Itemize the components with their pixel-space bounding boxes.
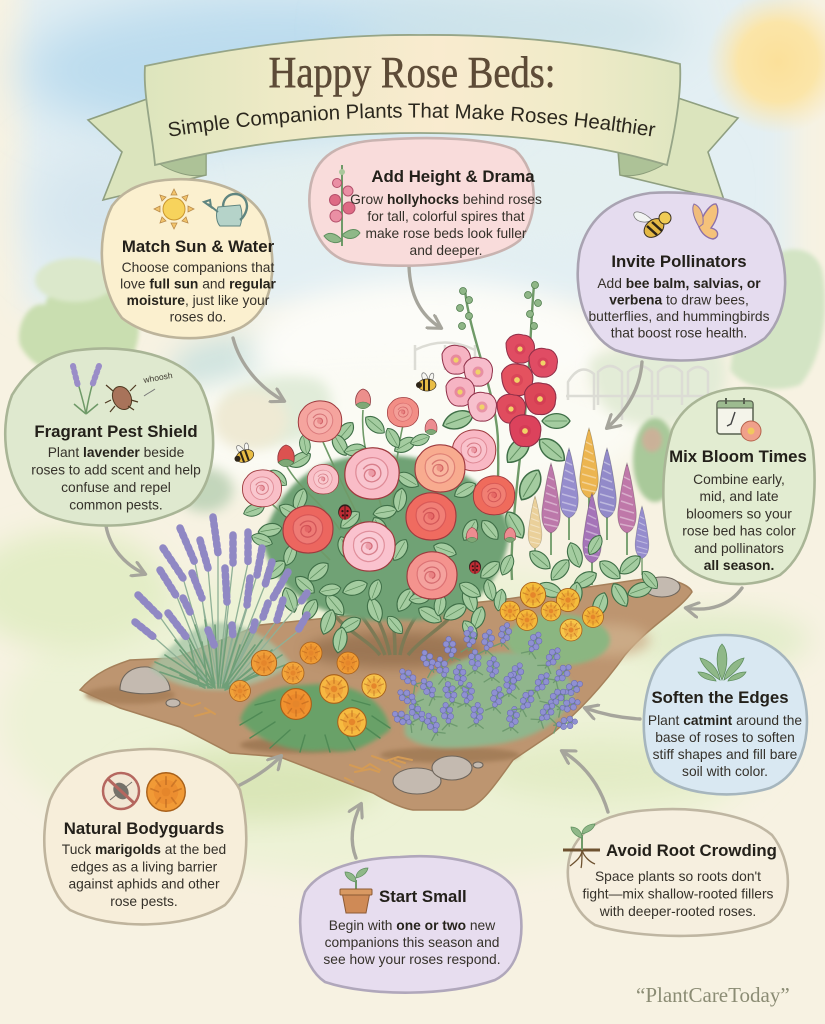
body text: companions this season and	[325, 935, 499, 950]
icon: no bugs	[103, 773, 139, 809]
banner ribbon	[145, 35, 680, 165]
body text: fight—mix shallow-rooted fillers	[583, 886, 774, 902]
icon: bee	[634, 212, 671, 241]
background bushes	[19, 249, 825, 512]
arrow: pollinators to flowers	[607, 362, 642, 428]
body text: verbena	[609, 292, 662, 308]
body text: roses to add scent and help	[31, 462, 201, 478]
icon: lavender sprig	[73, 366, 99, 414]
arrow: bloom times to spires	[686, 588, 742, 609]
body text: love	[120, 276, 149, 292]
icon: sun	[154, 189, 194, 229]
panel: fragrant pest shield	[5, 348, 213, 526]
catmint	[389, 621, 586, 748]
body text: Tuck marigolds at the bed	[62, 842, 226, 857]
icon: calendar	[717, 398, 753, 434]
arrow: soften edges to catmint	[585, 708, 640, 719]
body text: for tall, colorful spires that	[367, 209, 525, 224]
body text: Combine early,	[693, 472, 785, 487]
body text: Choose companions that	[122, 260, 274, 275]
heading: Natural Bodyguards	[64, 819, 224, 838]
body text: bloomers so your	[686, 506, 792, 521]
ladybugs	[338, 504, 481, 574]
body text: Begin with one or two new	[329, 918, 495, 933]
heading: Soften the Edges	[651, 688, 789, 707]
lupine spires	[526, 428, 661, 620]
body text: edges as a living barrier	[71, 859, 218, 874]
title banner	[86, 34, 740, 202]
sun	[706, 0, 825, 134]
body text: with deeper-rooted roses.	[599, 904, 756, 919]
panel: mix bloom times	[663, 388, 815, 584]
heading: Start Small	[379, 887, 467, 906]
heading: Fragrant Pest Shield	[34, 422, 198, 441]
body text: , just like your	[185, 293, 270, 308]
fence	[415, 342, 715, 420]
body text: against aphids and other	[68, 877, 220, 892]
arrow: bodyguards to marigolds	[236, 756, 281, 787]
body text: base of roses to soften	[655, 730, 795, 745]
body text: to draw bees,	[662, 292, 749, 308]
heading: Add Height & Drama	[371, 167, 535, 186]
arrow: start small to bed	[352, 804, 361, 858]
panel: avoid root crowding	[563, 809, 788, 936]
body text: Plant lavender beside	[48, 445, 184, 460]
icon: marigold	[147, 773, 185, 811]
panel: invite pollinators	[578, 192, 785, 360]
body text: common pests.	[69, 498, 163, 512]
heading: Avoid Root Crowding	[606, 841, 777, 860]
body text: confuse and repel	[61, 480, 171, 495]
icon: beetle	[105, 383, 138, 413]
marigolds front left	[230, 642, 390, 752]
subtitle text	[150, 118, 673, 140]
title banner: Simple Companion Plants That Make Roses Healthier	[168, 102, 656, 136]
body text: butterflies, and hummingbirds	[589, 309, 770, 324]
icon: watering can	[204, 194, 247, 226]
rose bush	[230, 373, 517, 655]
watermark: “PlantCareToday”	[636, 983, 790, 1007]
icon: butterfly	[693, 204, 718, 239]
panel: natural bodyguards	[44, 749, 246, 924]
body text: see how your roses respond.	[323, 952, 501, 967]
heading: Mix Bloom Times	[669, 447, 807, 466]
body text: rose pests.	[110, 894, 178, 909]
body text: mid, and late	[700, 489, 779, 504]
body text: roses do.	[170, 310, 226, 324]
arrow: root crowding to soil	[562, 751, 608, 812]
body text: Plant catmint around the	[648, 713, 802, 728]
panel: soften the edges	[644, 635, 807, 794]
icon: seedling with roots	[563, 824, 600, 868]
body text: Add bee balm, salvias, or	[597, 276, 761, 291]
garden soil bed	[80, 578, 692, 810]
body text: make rose beds look fuller	[365, 226, 527, 241]
body text: Space plants so roots don't	[595, 869, 761, 884]
lavender clump	[135, 517, 307, 690]
marigolds back right	[500, 582, 610, 666]
icon: leafy plant	[698, 644, 746, 681]
heading: Invite Pollinators	[611, 252, 747, 271]
bees	[230, 373, 436, 465]
body text: and pollinators	[694, 541, 784, 556]
banner tails	[88, 98, 738, 200]
icon: potted seedling	[340, 868, 372, 913]
body text: all season.	[704, 558, 774, 573]
arrow: height to hollyhocks	[409, 266, 441, 328]
body text: full sun and regular	[149, 276, 276, 292]
body text: rose bed has color	[682, 524, 796, 539]
body text: soil with color.	[682, 764, 768, 779]
icon: flower	[741, 421, 761, 441]
heading: Match Sun & Water	[122, 237, 275, 256]
whoosh label: whoosh	[142, 370, 173, 385]
body text: Grow hollyhocks behind roses	[350, 192, 542, 207]
arrow: match sun to roses	[233, 338, 284, 401]
icon: hollyhock	[324, 165, 360, 246]
panel: add height and drama	[309, 138, 542, 266]
body text: that boost rose health.	[611, 326, 747, 340]
body text: and deeper.	[410, 243, 482, 258]
hollyhocks	[440, 282, 570, 590]
body text: stiff shapes and fill bare	[653, 747, 798, 762]
lawn	[0, 560, 780, 880]
body text: moisture	[127, 293, 185, 308]
panel: match sun and water	[102, 179, 276, 338]
panel: start small	[300, 856, 521, 993]
rocks	[120, 577, 680, 794]
title text: Happy Rose Beds:	[268, 48, 556, 97]
arrow: pest shield to lavender	[106, 526, 145, 574]
